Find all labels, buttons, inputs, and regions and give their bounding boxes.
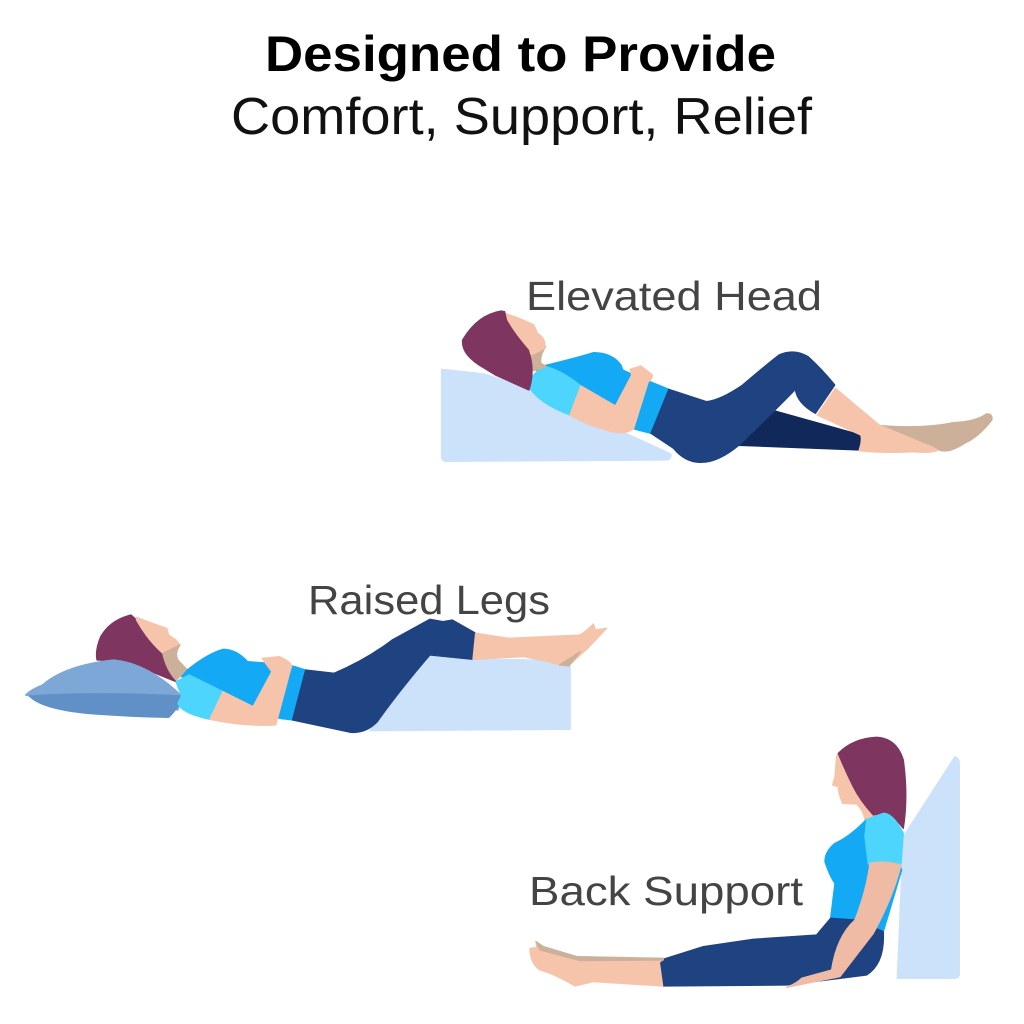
label: raised legs: Raised Legs — [308, 577, 550, 623]
label: back support: Back Support — [529, 868, 804, 914]
subtitle: Comfort, Support, Relief — [231, 88, 813, 146]
illustration: raised legs — [26, 615, 607, 732]
title: Designed to Provide — [265, 26, 776, 82]
illustration: back support — [530, 737, 959, 987]
label: elevated head: Elevated Head — [526, 273, 822, 319]
illustration: elevated head — [442, 311, 992, 462]
